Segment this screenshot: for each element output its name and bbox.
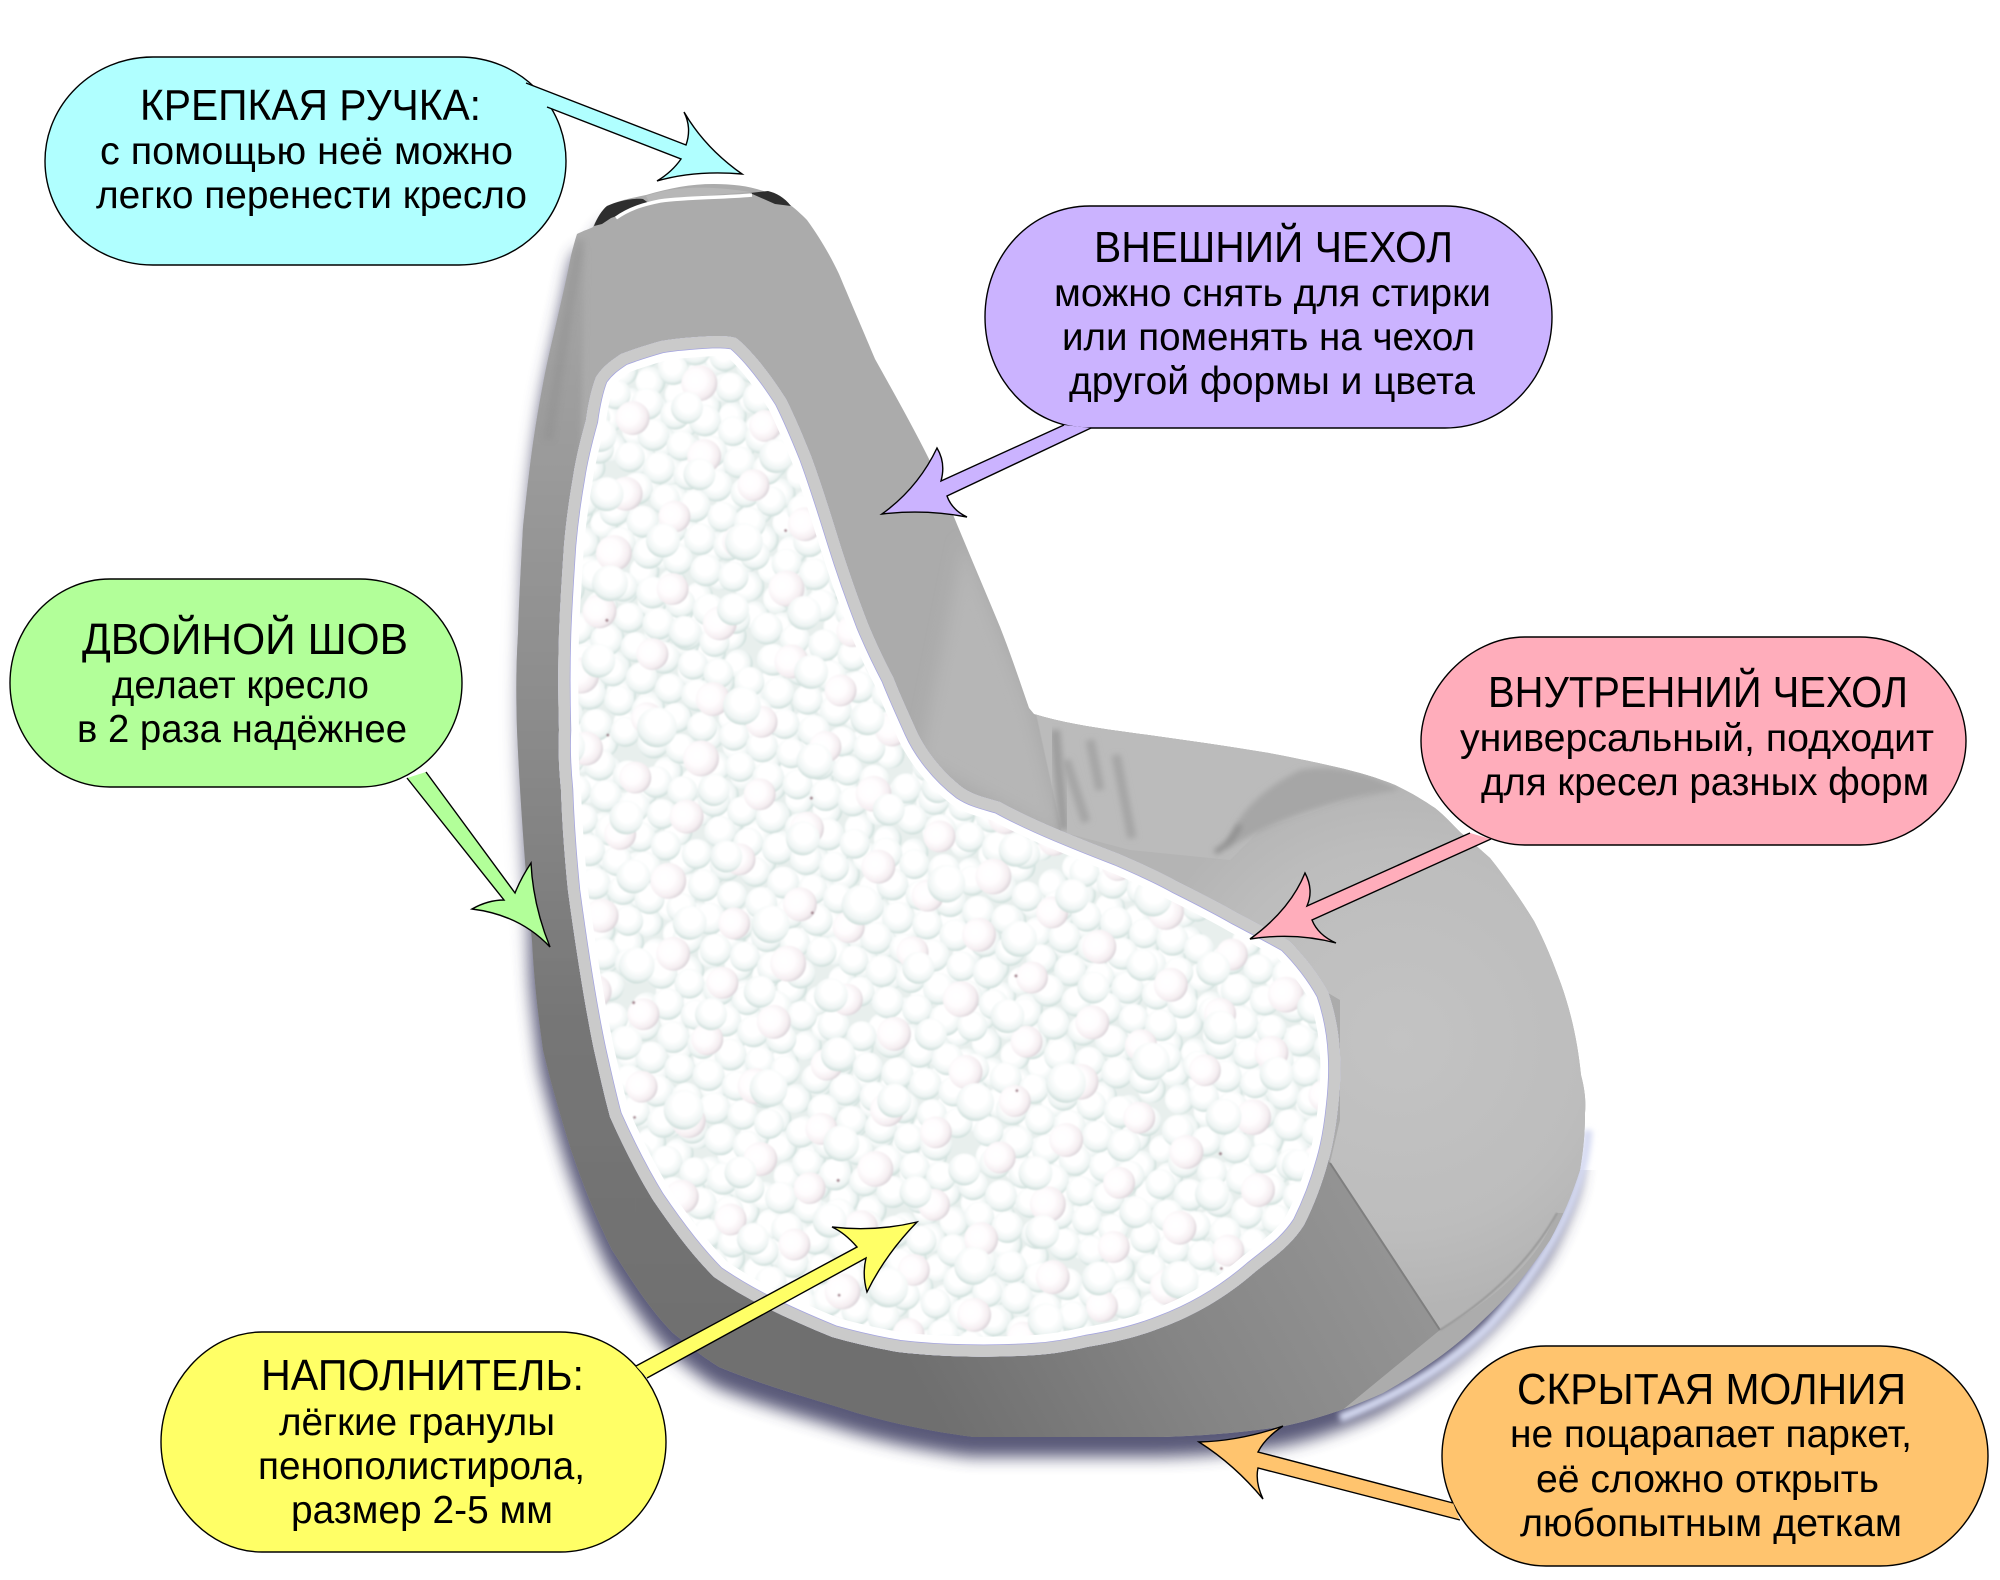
callout: double seam bbox=[10, 579, 550, 947]
bubble bbox=[45, 57, 566, 265]
handle strap and seam bbox=[594, 188, 791, 226]
arrow to zipper bbox=[1199, 1426, 1460, 1520]
filling cutout with foam beads bbox=[550, 330, 1350, 1360]
arrow to handle bbox=[526, 83, 742, 181]
description line 3: любопытным деткам bbox=[1520, 1502, 1902, 1545]
heading: КРЕПКАЯ РУЧКА: bbox=[140, 81, 481, 130]
arrow to seam bbox=[407, 772, 550, 947]
description line 2: пенополистирола, bbox=[258, 1445, 585, 1488]
bean bag chair illustration bbox=[400, 150, 1640, 1460]
arrow to beads bbox=[636, 1222, 917, 1378]
arrow to outer cover bbox=[882, 425, 1091, 517]
description line 2: для кресел разных форм bbox=[1481, 761, 1929, 804]
heading: НАПОЛНИТЕЛЬ: bbox=[261, 1351, 584, 1400]
description line 2: в 2 раза надёжнее bbox=[77, 708, 407, 751]
heading: ДВОЙНОЙ ШОВ bbox=[82, 613, 408, 664]
description line 1: лёгкие гранулы bbox=[279, 1401, 555, 1444]
description line 1: делает кресло bbox=[112, 664, 369, 707]
callout: outer cover bbox=[882, 206, 1552, 517]
floor shadow bbox=[400, 150, 1630, 1457]
bubble bbox=[1421, 637, 1966, 845]
description line 1: можно снять для стирки bbox=[1054, 272, 1491, 315]
description line 2: её сложно открыть bbox=[1536, 1458, 1879, 1501]
callout: inner cover bbox=[1250, 637, 1966, 943]
heading: ВНЕШНИЙ ЧЕХОЛ bbox=[1094, 221, 1453, 272]
heading: СКРЫТАЯ МОЛНИЯ bbox=[1517, 1365, 1906, 1414]
callout: filling bbox=[161, 1222, 917, 1552]
callout: hidden zipper bbox=[1199, 1346, 1988, 1566]
description line 2: или поменять на чехол bbox=[1062, 316, 1475, 359]
description line 1: не поцарапает паркет, bbox=[1510, 1413, 1912, 1456]
arrow to inner cover bbox=[1250, 833, 1491, 943]
inner cover band bbox=[558, 336, 1340, 1357]
bubble bbox=[161, 1332, 666, 1552]
bubble bbox=[1442, 1346, 1988, 1566]
bubble bbox=[985, 206, 1552, 428]
heading: ВНУТРЕННИЙ ЧЕХОЛ bbox=[1488, 666, 1908, 717]
description line 2: легко перенести кресло bbox=[96, 174, 527, 217]
description line 1: универсальный, подходит bbox=[1460, 717, 1934, 760]
callout: strong handle bbox=[45, 57, 742, 265]
description line 3: другой формы и цвета bbox=[1069, 360, 1475, 403]
description line 3: размер 2-5 мм bbox=[291, 1489, 553, 1532]
bubble bbox=[10, 579, 462, 787]
description line 1: с помощью неё можно bbox=[100, 130, 513, 173]
chair fabric bbox=[500, 170, 1640, 1460]
